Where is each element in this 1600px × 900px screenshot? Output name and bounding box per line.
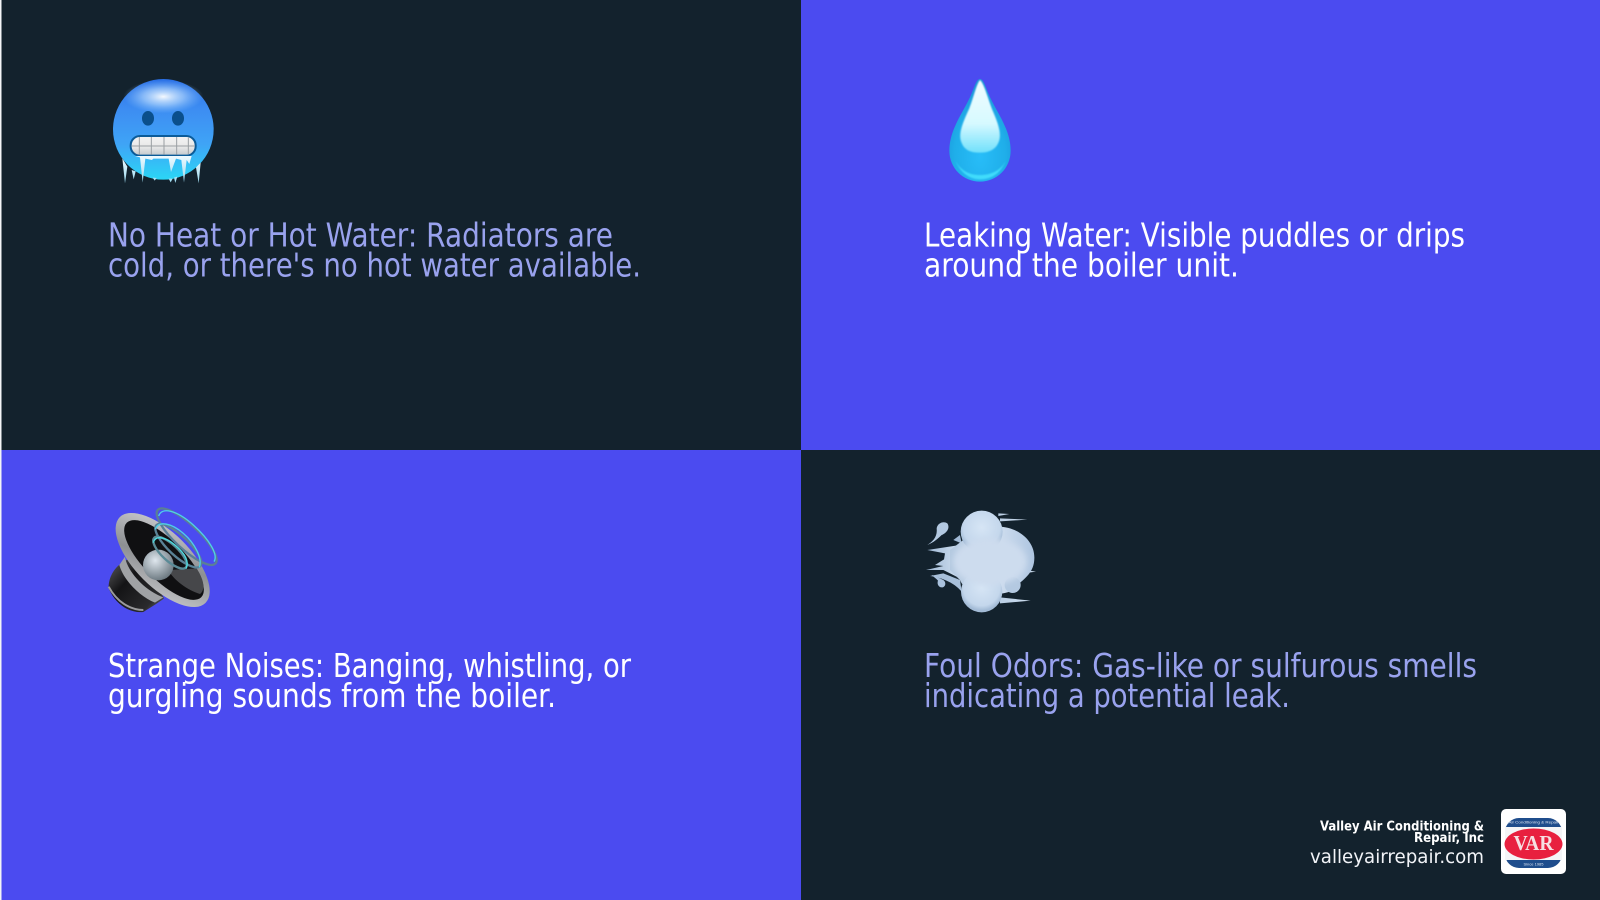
panel: foul odors — [801, 450, 1600, 900]
panel: leaking water — [801, 0, 1600, 450]
text: leaking water: around the boiler unit. — [924, 246, 1239, 284]
text: foul odors: Foul Odors: Gas-like or sulfurous smells — [924, 647, 1477, 685]
brand text: Valley Air Conditioning & — [1320, 818, 1484, 834]
text: strange noises — [108, 647, 632, 715]
icon: freezing face — [113, 79, 214, 183]
text: no heat — [108, 216, 641, 284]
icon: water drop — [949, 79, 1011, 182]
text: foul odors — [924, 647, 1477, 715]
brand text — [1310, 818, 1484, 868]
text: leaking water — [924, 216, 1465, 284]
text: leaking water: Leaking Water: Visible puddles or drips — [924, 216, 1465, 254]
logo — [1501, 809, 1566, 874]
text: strange noises: Strange Noises: Banging, whistling, or — [108, 647, 632, 685]
logo: Since 1985 — [1523, 862, 1544, 866]
panel: no heat — [2, 0, 801, 450]
text: foul odors: indicating a potential leak. — [924, 677, 1290, 715]
panel: strange noises — [2, 450, 801, 900]
icon: gas cloud — [926, 511, 1036, 612]
text: no heat: cold, or there's no hot water available. — [108, 246, 641, 284]
brand block — [1310, 809, 1566, 874]
text: strange noises: gurgling sounds from the boiler. — [108, 677, 556, 715]
icon: speaker — [100, 498, 225, 622]
logo: VAR — [1514, 831, 1554, 855]
text: no heat: No Heat or Hot Water: Radiators are — [108, 216, 613, 254]
logo: Air Conditioning & Repair — [1508, 820, 1559, 824]
brand text: Repair, Inc — [1414, 830, 1484, 846]
brand text: valleyairrepair.com — [1310, 846, 1484, 868]
